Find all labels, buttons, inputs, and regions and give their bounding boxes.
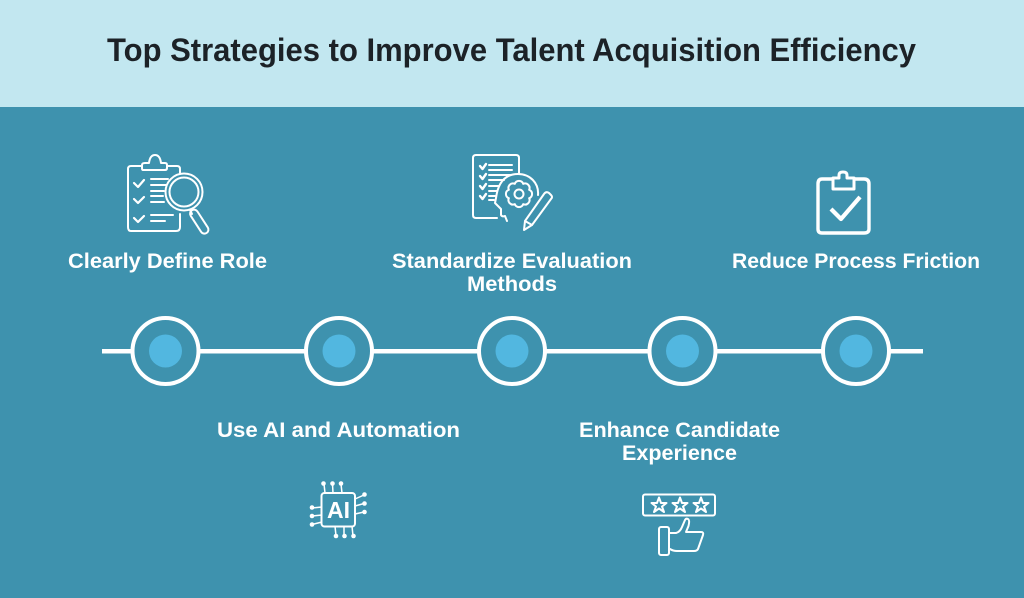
label: Enhance Candidate Experience [579, 419, 780, 465]
label: Standardize Evaluation Methods: Methods [467, 273, 557, 296]
icon: checklist with head, gear and pencil [473, 155, 552, 230]
node 5 [823, 318, 889, 384]
label: Enhance Candidate Experience: Experience [622, 442, 737, 465]
node 3 [479, 318, 545, 384]
icon: AI chip: AI [327, 497, 350, 523]
label: Reduce Process Friction: Reduce Process Friction [732, 250, 980, 273]
node 4 [650, 318, 716, 384]
icon: star rating and thumbs up [643, 494, 715, 555]
node 1 [132, 318, 198, 384]
label: Enhance Candidate Experience: Enhance Candidate [579, 419, 780, 442]
label: Standardize Evaluation Methods [392, 250, 632, 296]
icon: clipboard with magnifying glass [128, 155, 210, 235]
label: Use AI and Automation: Use AI and Automation [217, 419, 460, 442]
icon: AI chip [310, 481, 367, 538]
timeline [102, 318, 923, 384]
label: Clearly Define Role: Clearly Define Role [68, 250, 267, 273]
icon: clipboard with check mark [818, 172, 869, 233]
label: Standardize Evaluation Methods: Standardize Evaluation [392, 250, 632, 273]
title: Top Strategies to Improve Talent Acquisition Efficiency [107, 32, 916, 68]
timeline line [102, 349, 923, 354]
node 2 [306, 318, 372, 384]
header band [0, 0, 1024, 107]
